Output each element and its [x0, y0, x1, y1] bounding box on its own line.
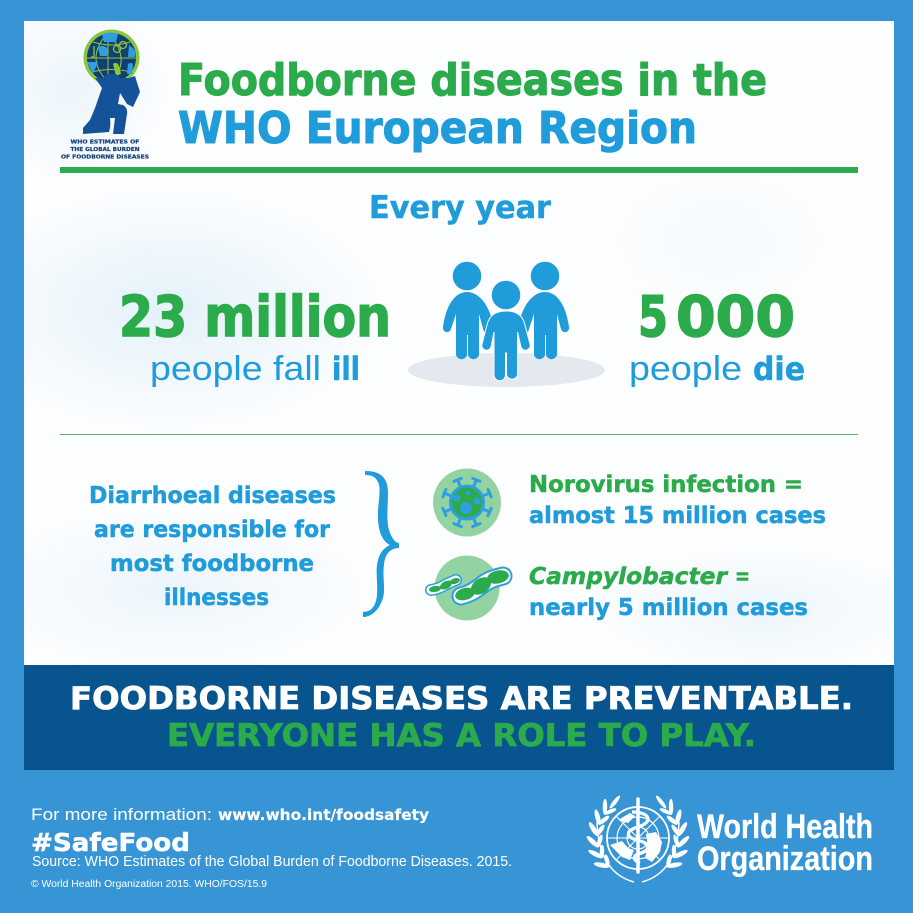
footer information text	[31, 805, 512, 890]
green rule under title	[60, 167, 858, 173]
title: Foodborne diseases in the	[178, 55, 767, 106]
globe grid	[607, 807, 669, 869]
logo caption: WHO ESTIMATES OF	[70, 140, 140, 146]
footer information text: For more information:	[31, 805, 212, 824]
globe icons	[87, 32, 136, 82]
organization name: Organization	[697, 840, 873, 878]
text: campylobacter cases	[529, 564, 808, 621]
stat: 23 million people fall ill	[119, 285, 391, 388]
banner: preventable message	[24, 665, 894, 770]
continents	[610, 813, 662, 862]
logo caption	[61, 140, 149, 160]
footer information text: © World Health Organization 2015. WHO/FOS/15.9	[31, 879, 267, 890]
stat: 23 million people fall ill: ill	[332, 350, 360, 388]
heading: every year: Every year	[369, 190, 552, 226]
laurel wreath left	[585, 794, 634, 882]
icon: campylobacter	[429, 556, 510, 620]
banner: preventable message: FOODBORNE DISEASES ARE PREVENTABLE.	[70, 681, 853, 717]
stat: 5 000 people die: people	[629, 350, 742, 388]
laurel wreath right	[642, 794, 691, 882]
stat: 5 000 people die: die	[753, 350, 805, 388]
left person	[443, 262, 494, 359]
divider	[60, 434, 858, 435]
organization name	[697, 808, 873, 878]
figure body	[83, 74, 140, 134]
text: campylobacter cases: nearly 5 million cases	[529, 595, 808, 621]
banner: preventable message: EVERYONE HAS A ROLE TO PLAY.	[167, 718, 756, 754]
globe rim	[84, 30, 140, 86]
text: norovirus cases: almost 15 million cases	[529, 503, 826, 529]
icon: curly brace	[363, 471, 399, 617]
icon: norovirus	[433, 468, 501, 536]
centre person	[482, 281, 530, 381]
logo caption: OF FOODBORNE DISEASES	[61, 154, 149, 160]
panel: main white area	[0, 0, 913, 680]
text block: diarrhoeal diseases	[89, 483, 336, 611]
footer information text: www.who.int/foodsafety	[218, 806, 429, 824]
footer information text: Source: WHO Estimates of the Global Burden of Foodborne Diseases. 2015.	[32, 854, 512, 870]
stat: 5 000 people die	[629, 285, 805, 388]
text block: diarrhoeal diseases: are responsible for	[94, 517, 331, 543]
organization name: World Health	[697, 808, 873, 846]
text: campylobacter cases: Campylobacter	[529, 564, 729, 590]
staff and serpent	[636, 799, 640, 872]
title: WHO European Region	[178, 103, 697, 154]
footer information text: #SafeFood	[31, 828, 190, 857]
logo: WHO estimates figure carrying globe	[61, 30, 149, 160]
text block: diarrhoeal diseases: illnesses	[164, 585, 269, 611]
logo caption: THE GLOBAL BURDEN	[70, 147, 140, 153]
stat: 5 000 people die: 5	[638, 285, 668, 350]
text block: diarrhoeal diseases: Diarrhoeal diseases	[89, 483, 336, 509]
logo: World Health Organization emblem	[585, 794, 873, 882]
stat: 23 million people fall ill: people fall	[150, 350, 321, 388]
title	[178, 55, 767, 154]
icon: group of people on shadow	[408, 262, 605, 387]
stat: 5 000 people die: 000	[676, 285, 795, 350]
large bacterium	[454, 568, 510, 602]
right person	[518, 262, 569, 359]
small bacterium	[429, 577, 461, 593]
text: campylobacter cases: =	[735, 564, 750, 590]
text block: diarrhoeal diseases: most foodborne	[110, 551, 314, 577]
stat: 23 million people fall ill: 23 million	[119, 285, 391, 350]
text: norovirus cases: Norovirus infection =	[529, 472, 803, 498]
text: norovirus cases	[529, 472, 826, 529]
